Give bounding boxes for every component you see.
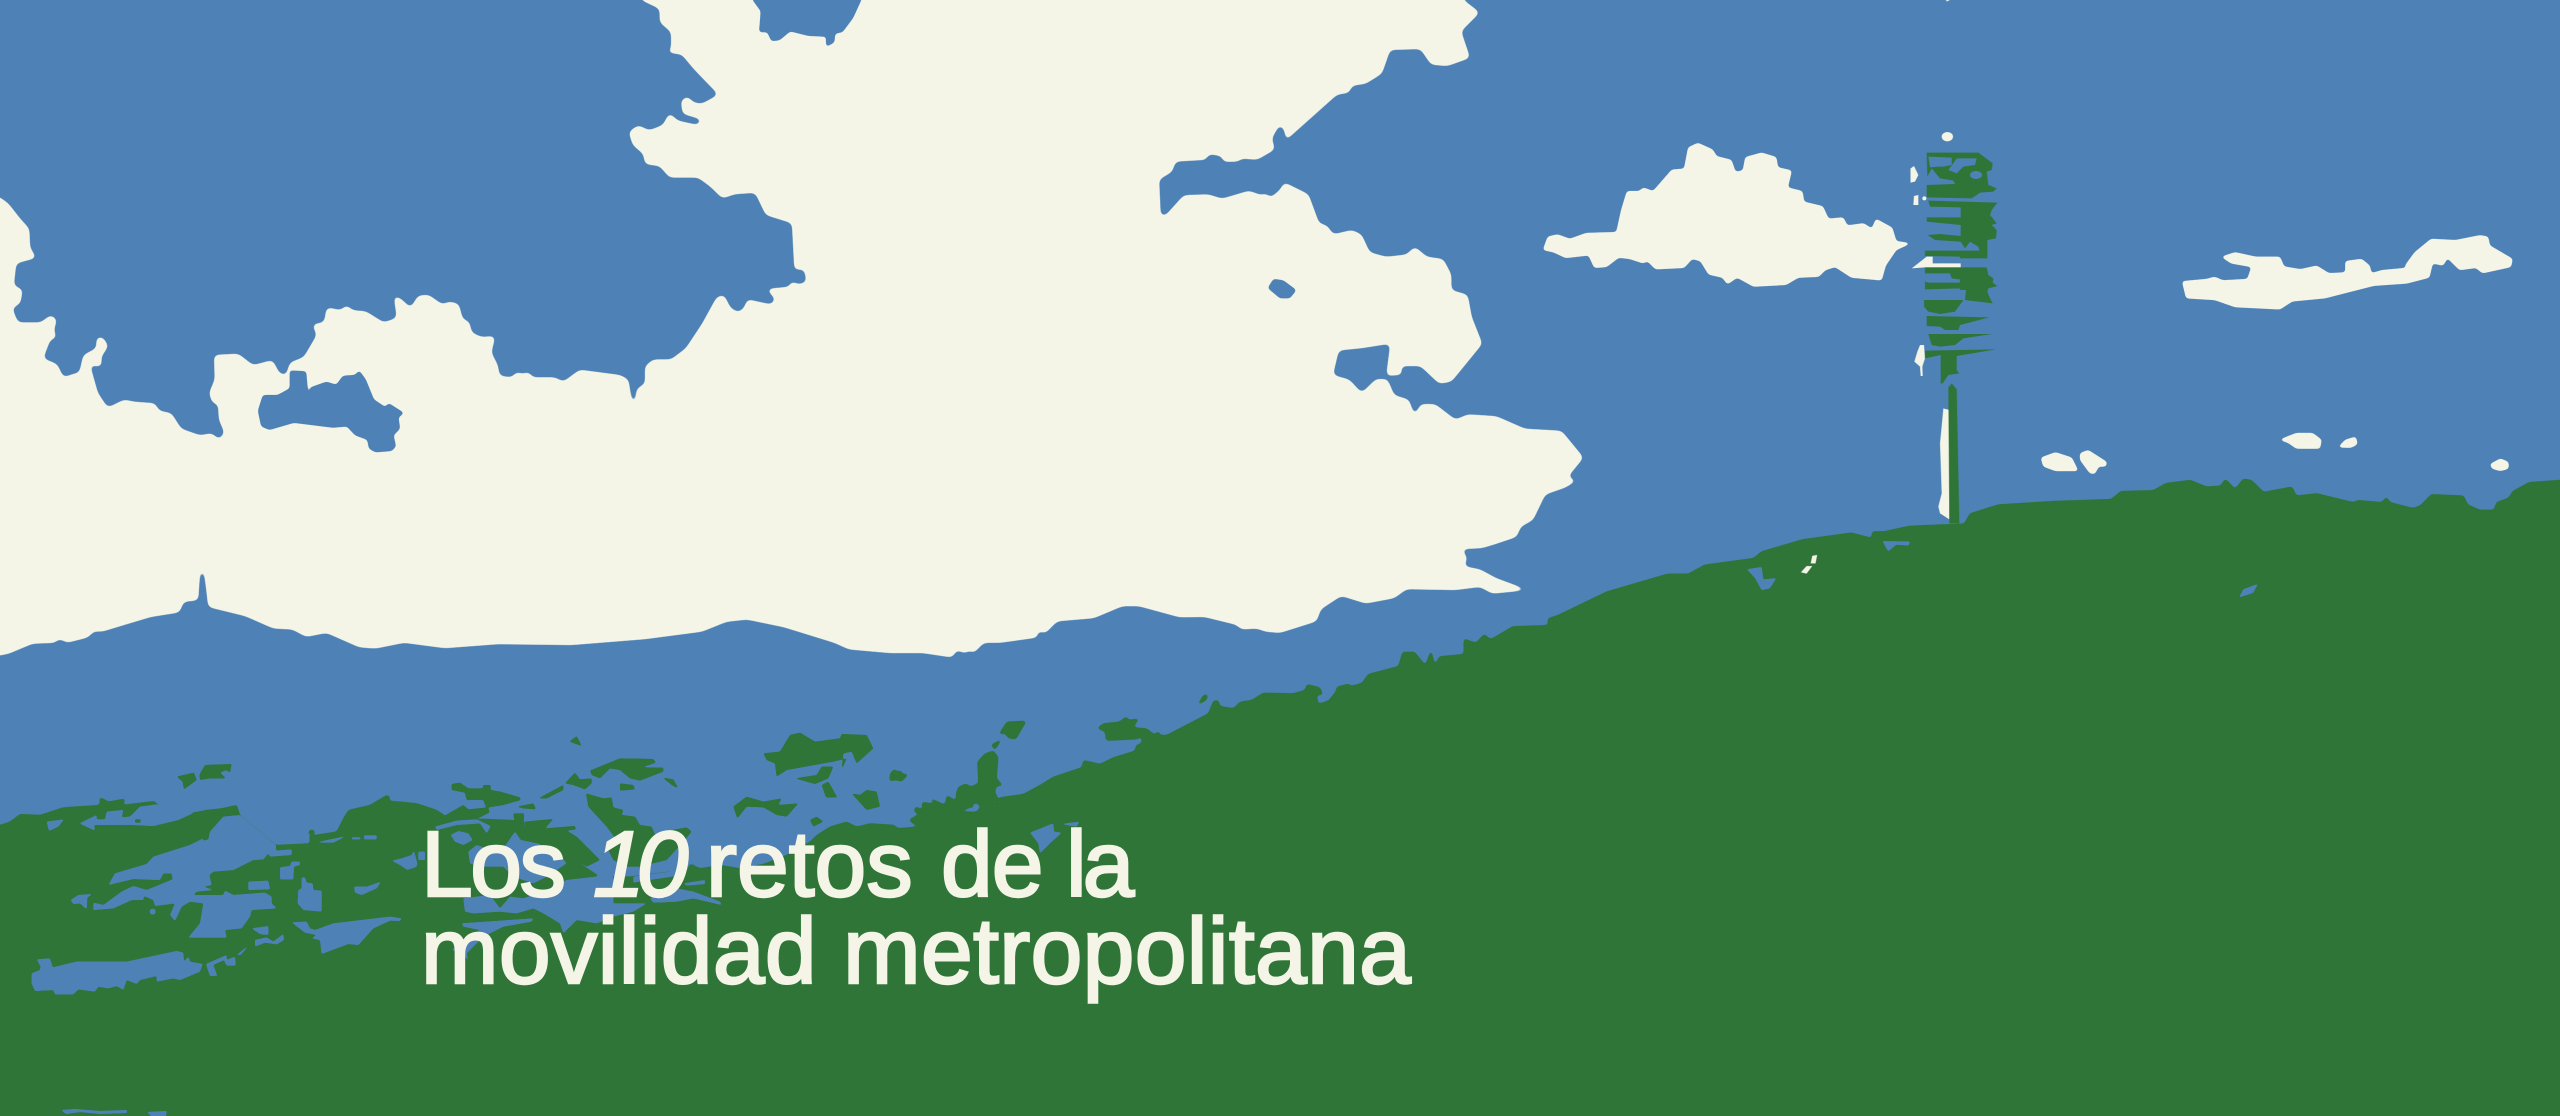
title: Los xyxy=(421,812,563,916)
icon: telecom tower xyxy=(1911,132,1997,523)
blue lakes and inlets across the land xyxy=(32,541,2258,1116)
green islands in the lakes xyxy=(135,733,880,867)
large cumulus cloud xyxy=(0,0,1584,661)
title: la xyxy=(1066,812,1135,916)
title: retos xyxy=(706,812,913,916)
green hill and land mass xyxy=(0,478,2560,1116)
small cream flecks on the hill xyxy=(1801,555,1817,574)
title: 10 xyxy=(593,812,688,916)
title: de xyxy=(941,812,1042,916)
small clouds xyxy=(1543,0,2513,474)
title: movilidad metropolitana xyxy=(421,899,1411,1003)
